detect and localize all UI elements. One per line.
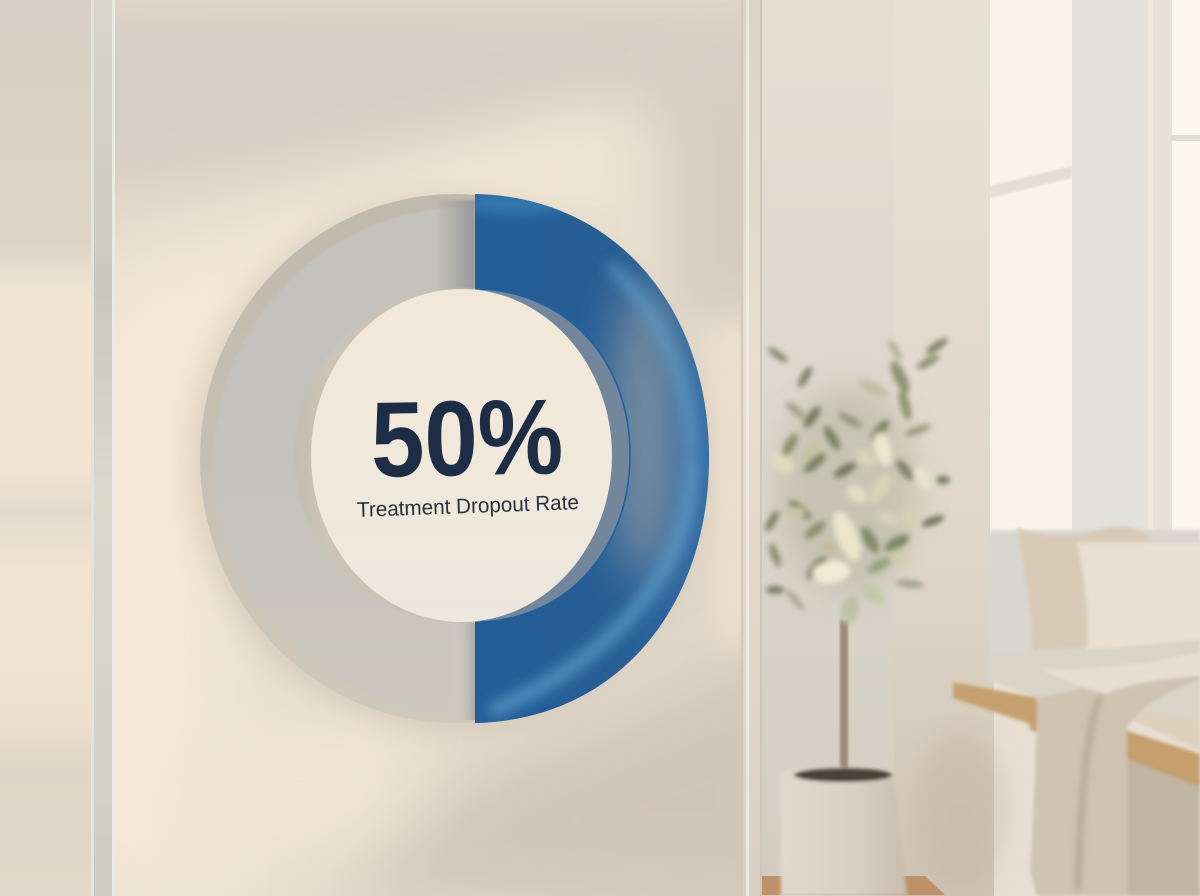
blue rim highlight upper [610,265,692,458]
grey inner wall [295,288,475,622]
back cushion [1017,526,1150,651]
throw blanket highlight [1040,652,1200,694]
panel left edge [91,0,115,896]
percentage value: 50% [370,376,564,500]
bench front [1120,756,1200,896]
blue desaturated sheen [609,280,681,580]
room wall background [762,0,1005,896]
throw blanket fold [1078,696,1100,890]
trunk [840,620,848,775]
grey segment side wall [200,194,475,723]
segment: grey 50% [200,194,475,723]
foliage [763,335,950,626]
wooden bench [953,682,1037,725]
sunlight patches on panel [115,0,741,896]
potted olive tree [763,335,950,896]
grey segment face [216,209,455,478]
donut cast shadow [190,194,706,730]
floor [762,876,945,895]
window bench with cushions and throw [953,526,1200,896]
chart caption: Treatment Dropout Rate [357,491,579,522]
blue inner wall [475,289,630,622]
grey top shading near divider [442,199,475,290]
glass panel [91,0,762,896]
grey bottom shading near divider [464,622,475,720]
blue upper sheen [475,194,563,218]
left background strip [0,0,92,896]
window [990,0,1200,540]
blue rim highlight lower [490,458,692,712]
bright leaves [871,431,895,467]
planter [780,767,907,896]
window recess below sill [990,530,1200,660]
segment: blue 50% [475,194,709,723]
donut chart [190,190,722,730]
blue inner edge line [480,289,630,622]
panel right edge [741,0,762,896]
blue base [475,190,715,730]
seat pad [987,640,1200,745]
centre hole [311,289,612,622]
throw blanket [1030,660,1200,896]
front cushion [1077,543,1200,651]
seat cushion edge [1135,708,1200,750]
